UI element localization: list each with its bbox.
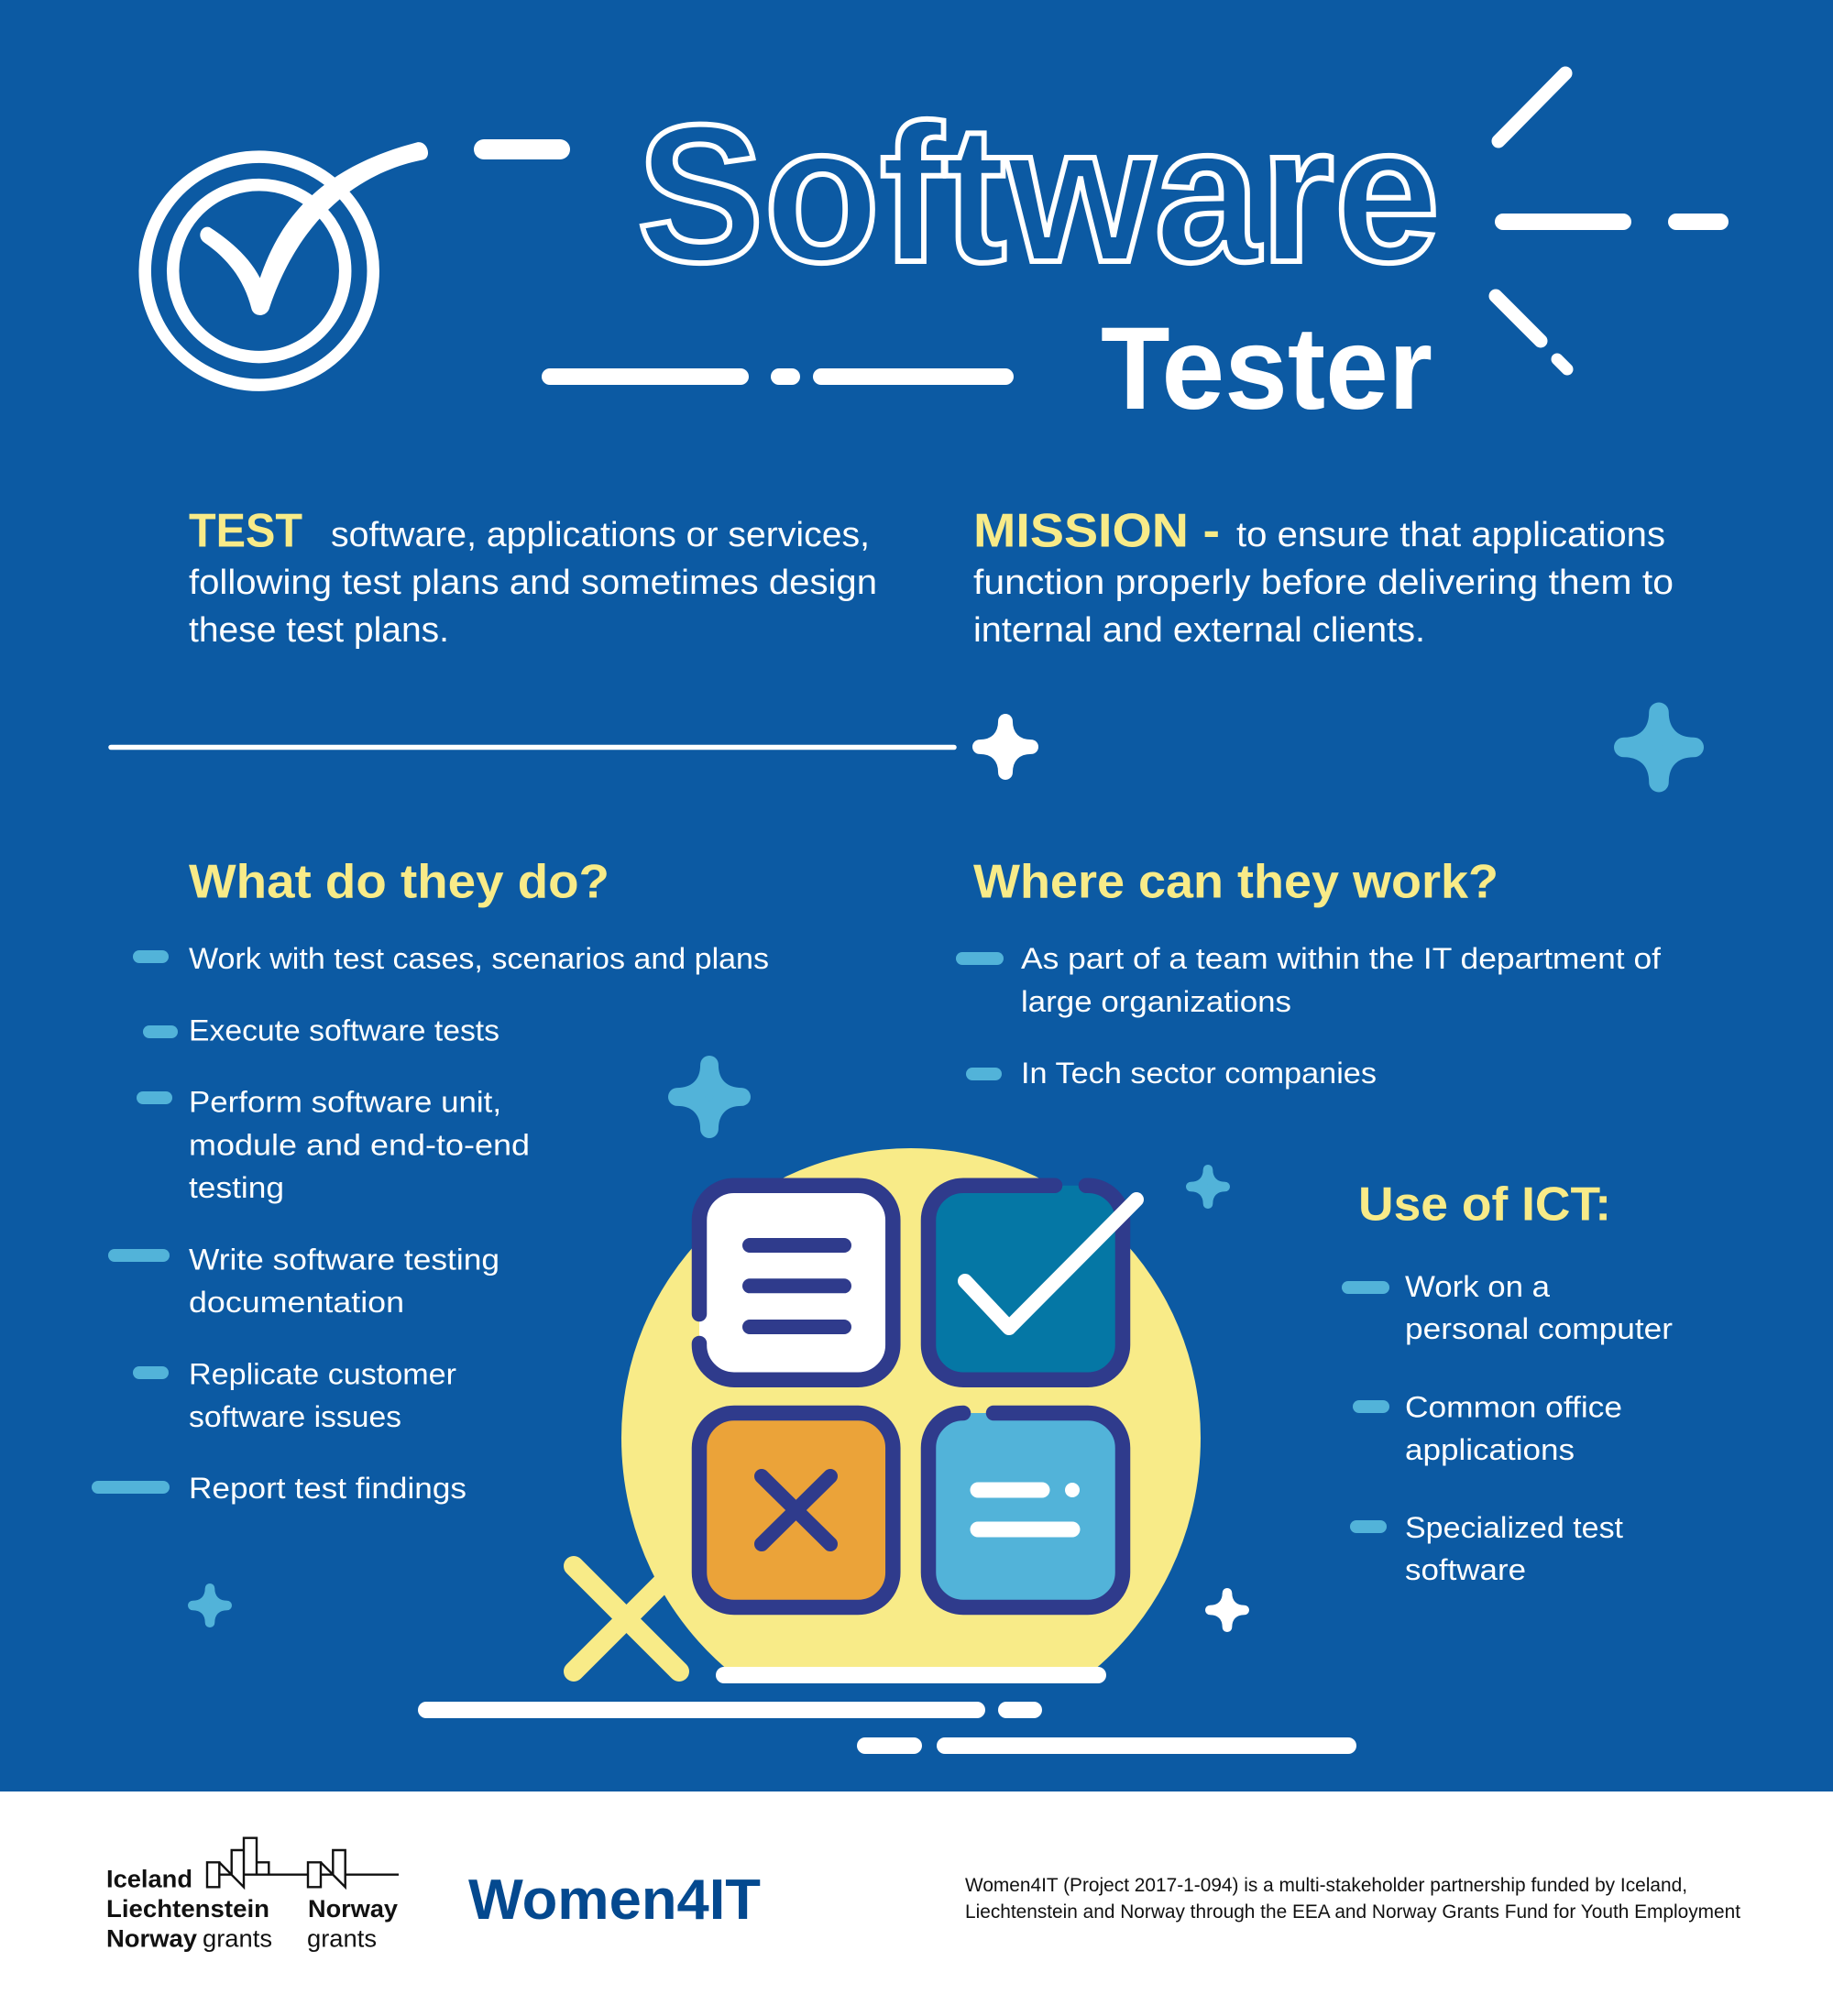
logo: Iceland Liechtenstein Norway grants: Liechtenstein — [106, 1895, 269, 1923]
text block: mission: internal and external clients. — [973, 611, 1425, 650]
title decorative dashes — [484, 73, 1720, 377]
divider with sparkle — [111, 721, 1031, 772]
icon: blue sparkle small — [1191, 1169, 1225, 1204]
footer panel — [0, 1791, 1833, 2016]
yellow cross — [574, 1566, 679, 1671]
list: what do they do: Work with test cases, scenarios and plans — [189, 942, 769, 975]
logo: Iceland Liechtenstein Norway grants: Iceland — [106, 1866, 192, 1893]
text block: mission: MISSION - — [973, 504, 1220, 557]
list: use of ICT: software — [1405, 1553, 1526, 1586]
logo: Iceland Liechtenstein Norway grants: Norway — [308, 1895, 398, 1923]
footer note: Liechtenstein and Norway through the EEA and Norway Grants Fund for Youth Employment — [965, 1901, 1740, 1923]
footer note — [965, 1875, 1740, 1923]
list: where can they work: As part of a team within the IT department of — [1021, 942, 1661, 975]
list: what do they do: Replicate customer — [189, 1358, 456, 1391]
tile: check — [928, 1186, 1136, 1380]
list: use of ICT: applications — [1405, 1433, 1575, 1466]
heading: what do they do: What do they do? — [189, 856, 609, 909]
list: what do they do: module and end-to-end — [189, 1129, 530, 1162]
icon: blue sparkle right — [1624, 712, 1694, 783]
title: Software: Software — [637, 84, 1440, 303]
text block: mission — [973, 504, 1674, 650]
logo: Iceland Liechtenstein Norway grants: Norway — [106, 1925, 197, 1953]
text block: test: following test plans and sometimes design — [189, 564, 877, 602]
heading: use of ICT: Use of ICT: — [1358, 1178, 1611, 1232]
list: use of ICT: Specialized test — [1405, 1511, 1623, 1544]
text block: test: software, applications or services, — [331, 516, 870, 554]
logo: Iceland Liechtenstein Norway grants: grants — [203, 1925, 272, 1953]
heading: where can they work: Where can they work? — [973, 856, 1498, 909]
list: use of ICT: Work on a — [1405, 1270, 1550, 1303]
list: what do they do: Execute software tests — [189, 1013, 499, 1046]
list: use of ICT — [1348, 1270, 1673, 1586]
tile: cross — [699, 1413, 893, 1607]
list: what do they do: Perform software unit, — [189, 1085, 501, 1118]
icon: blue sparkle large — [677, 1065, 741, 1129]
text block: mission: function properly before delivering them to — [973, 564, 1674, 602]
text block: test: these test plans. — [189, 611, 449, 650]
text block: test — [189, 504, 877, 650]
logo: Iceland Liechtenstein Norway grants: grants — [307, 1925, 377, 1953]
icon: blue sparkle bottom left — [192, 1588, 227, 1623]
list: where can they work: large organizations — [1021, 985, 1291, 1018]
list: what do they do: documentation — [189, 1286, 404, 1319]
ground lines — [426, 1675, 1348, 1746]
tile: notes — [928, 1413, 1123, 1607]
logo: Women4IT: Women4IT — [468, 1868, 761, 1932]
list: what do they do: testing — [189, 1171, 284, 1204]
list: use of ICT: personal computer — [1405, 1312, 1673, 1345]
list: where can they work — [962, 942, 1661, 1090]
icon: circled check mark — [145, 142, 428, 385]
list: use of ICT: Common office — [1405, 1391, 1622, 1424]
list: what do they do: software issues — [189, 1400, 401, 1433]
text block: mission: to ensure that applications — [1236, 516, 1665, 554]
list: what do they do: Report test findings — [189, 1472, 466, 1505]
yellow circle — [621, 1148, 1201, 1675]
text block: test: TEST — [189, 504, 302, 557]
title: Tester: Tester — [1101, 303, 1432, 434]
list: what do they do: Write software testing — [189, 1243, 499, 1276]
tile: document — [699, 1186, 893, 1380]
icon: white sparkle small — [1210, 1593, 1245, 1627]
illustration: test tiles on yellow circle — [426, 1148, 1348, 1746]
list: where can they work: In Tech sector companies — [1021, 1057, 1377, 1090]
list: what do they do — [98, 942, 769, 1505]
footer note: Women4IT (Project 2017-1-094) is a multi-stakeholder partnership funded by Iceland, — [965, 1875, 1687, 1896]
logo: Iceland Liechtenstein Norway grants — [106, 1838, 399, 1953]
